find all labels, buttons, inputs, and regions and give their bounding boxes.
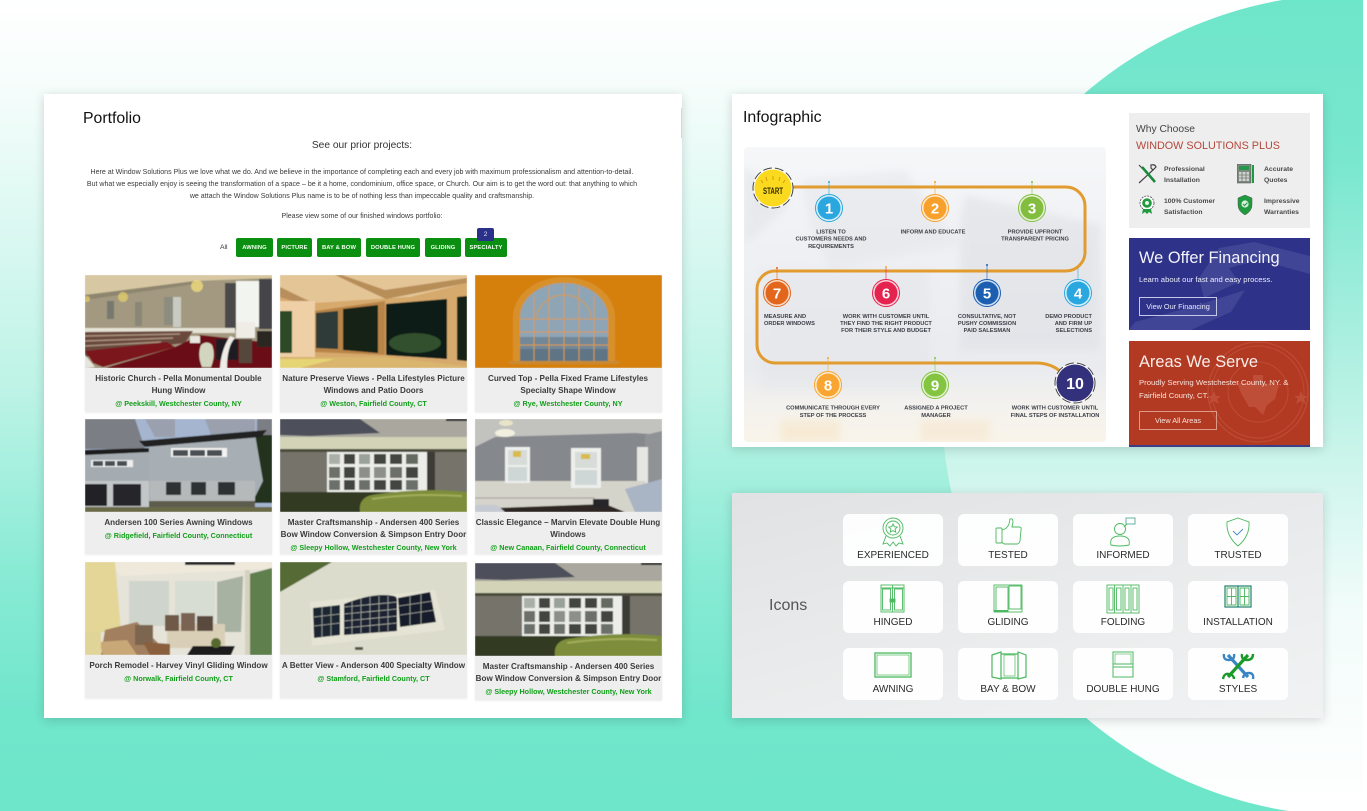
icon card: gliding: GLIDING: [987, 617, 1029, 628]
step labels: PAID SALESMAN: [964, 328, 1010, 334]
step 9: [922, 372, 948, 398]
icon card: informed: INFORMED: [1096, 550, 1150, 561]
areas button: [1139, 411, 1217, 430]
icon card: hinged: [843, 581, 943, 633]
card: historic church: [85, 275, 272, 412]
card: classic elegance: Windows: [550, 530, 586, 539]
step labels: FINAL STEPS OF INSTALLATION: [1011, 413, 1099, 419]
card: curved top: [474, 275, 662, 412]
feature: professional installation: [1164, 166, 1205, 184]
filter: bay and bow: BAY & BOW: [322, 245, 356, 251]
step 5: 5: [983, 286, 991, 302]
card: bow window: @ Sleepy Hollow, Westchester County, New York: [290, 543, 457, 552]
filter: awning: [236, 238, 273, 257]
card: a better view: A Better View - Anderson 400 Specialty Window: [282, 661, 465, 670]
card: curved top: @ Rye, Westchester County, NY: [514, 399, 622, 408]
filter: double hung: [366, 238, 420, 257]
intro text: But what we especially enjoy is seeing the transformation of a space – be it a home, condominium, office space, or Church. Our aim is to get the word out: that anything to which: [87, 181, 637, 188]
filter: picture: [277, 238, 312, 257]
step 3: [1018, 194, 1046, 222]
areas text: [1139, 378, 1288, 400]
card: bow window: [280, 419, 467, 554]
process path: [757, 187, 1085, 373]
intro text: [87, 168, 637, 200]
portfolio prompt: Please view some of our finished windows portfolio:: [282, 213, 442, 220]
icon card: installation: [1188, 581, 1288, 633]
filter count badge: [477, 228, 494, 241]
icon card: awning: AWNING: [873, 684, 913, 695]
heading: icons: Icons: [769, 597, 807, 614]
heading: infographic: Infographic: [743, 109, 822, 126]
panel: infographic: [732, 94, 1323, 447]
panel: portfolio: [44, 94, 682, 718]
icon card: double hung: [1073, 648, 1173, 700]
card: andersen awning: [85, 419, 272, 554]
step 2: 2: [931, 200, 939, 218]
icon card: awning: [843, 648, 943, 700]
financing button: [1139, 297, 1217, 316]
stamp motif: [1208, 342, 1308, 442]
step 1: [816, 194, 842, 222]
card: classic elegance: @ New Canaan, Fairfield County, Connecticut: [490, 543, 646, 552]
filter: bay and bow: [317, 238, 361, 257]
card: bow window: Master Craftsmanship - Andersen 400 Series: [288, 518, 459, 527]
icon: calculator: [1237, 164, 1254, 184]
step 10: 10: [1066, 376, 1084, 393]
step labels: MANAGER: [921, 413, 951, 419]
step labels: LISTEN TO: [816, 230, 846, 236]
feature: impressive warranties: [1264, 198, 1300, 216]
icon card: folding: [1073, 581, 1173, 633]
card: bow window repeat: [475, 563, 662, 700]
step labels: WORK WITH CUSTOMER UNTIL: [1012, 406, 1099, 412]
step 6: 6: [882, 286, 890, 302]
step labels: COMMUNICATE THROUGH EVERY: [786, 406, 880, 412]
card: bow window repeat: Bow Window Conversion & Simpson Entry Door: [476, 674, 661, 683]
bottom edge: [1129, 445, 1310, 447]
areas text: Proudly Serving Westchester County, NY. &: [1139, 378, 1288, 387]
filter: specialty: SPECIALTY: [469, 245, 502, 251]
card: bow window repeat: @ Sleepy Hollow, Westchester County, New York: [485, 687, 652, 696]
step labels: PROVIDE UPFRONT: [1008, 230, 1063, 236]
icon card: styles: [1188, 648, 1288, 700]
step labels: WORK WITH CUSTOMER UNTIL: [843, 314, 930, 320]
areas heading: Areas We Serve: [1139, 353, 1258, 371]
step 1: 1: [825, 200, 833, 218]
feature: accurate quotes: Quotes: [1264, 176, 1287, 184]
step labels: INFORM AND EDUCATE: [901, 230, 966, 236]
filter count badge: 2: [484, 231, 487, 238]
heading: portfolio: Portfolio: [83, 110, 141, 127]
step 2: [922, 194, 948, 222]
step labels: ORDER WINDOWS: [764, 321, 815, 327]
why choose heading: Why Choose: [1136, 124, 1195, 135]
step labels: CONSULTATIVE, NOT: [958, 314, 1017, 320]
filter: all: All: [220, 244, 228, 251]
hand motif: [1129, 242, 1310, 330]
card: nature preserve views: @ Weston, Fairfield County, CT: [320, 399, 427, 408]
icon card: trusted: [1188, 514, 1288, 566]
financing button: View Our Financing: [1146, 302, 1210, 311]
start badge: START: [763, 186, 783, 197]
step labels: STEP OF THE PROCESS: [800, 413, 866, 419]
step labels: [764, 230, 1099, 419]
icon: shield: [1238, 195, 1252, 215]
card: curved top: Specialty Shape Window: [520, 386, 616, 395]
step 6: [872, 280, 900, 306]
feature: customer satisfaction: 100% Customer: [1164, 198, 1215, 205]
filter: specialty: [465, 238, 507, 257]
step labels: ASSIGNED A PROJECT: [904, 406, 968, 412]
card: classic elegance: Classic Elegance – Marvin Elevate Double Hung: [476, 518, 660, 527]
step labels: REQUIREMENTS: [808, 244, 854, 250]
icon card: hinged: HINGED: [874, 617, 912, 628]
icon card: double hung: DOUBLE HUNG: [1086, 684, 1160, 695]
filter: awning: AWNING: [242, 245, 267, 251]
card: nature preserve views: Nature Preserve Views - Pella Lifestyles Picture: [282, 374, 465, 383]
feature: accurate quotes: Accurate: [1264, 166, 1293, 173]
icon card: folding: FOLDING: [1101, 617, 1145, 628]
card: curved top: Curved Top - Pella Fixed Frame Lifestyles: [488, 374, 648, 383]
filter: gliding: [425, 238, 461, 257]
feature: customer satisfaction: [1164, 198, 1215, 216]
card: nature preserve views: Windows and Patio Doors: [324, 386, 423, 395]
intro text: we attach the Window Solutions Plus name is to be of nothing less than impeccable quality and craftsmanship.: [190, 193, 534, 200]
card: historic church: Hung Window: [152, 386, 205, 395]
step labels: DEMO PRODUCT: [1045, 314, 1093, 320]
step labels: FOR THEIR STYLE AND BUDGET: [841, 328, 931, 334]
process infographic: [744, 147, 1106, 442]
sidebar: financing: [1129, 238, 1310, 330]
step labels: THEY FIND THE RIGHT PRODUCT: [840, 321, 932, 327]
step 7: [764, 280, 790, 306]
feature: customer satisfaction: Satisfaction: [1164, 208, 1203, 216]
step labels: CUSTOMERS NEEDS AND: [795, 236, 867, 242]
icon card: experienced: EXPERIENCED: [857, 550, 929, 561]
card: porch remodel: Porch Remodel - Harvey Vinyl Gliding Window: [89, 661, 268, 670]
card: porch remodel: [85, 562, 272, 698]
sidebar: why choose: [1129, 113, 1310, 228]
step labels: PUSHY COMMISSION: [958, 321, 1016, 327]
intro text: Here at Window Solutions Plus we love what we do. And we believe in the importance of completing each and every job with maximum professionalism and attention-to-detail.: [91, 169, 633, 176]
icon card: tested: TESTED: [988, 550, 1028, 561]
card: bow window repeat: Master Craftsmanship - Andersen 400 Series: [483, 662, 654, 671]
icon card: tested: [958, 514, 1058, 566]
step labels: SELECTIONS: [1056, 328, 1092, 334]
step 3: 3: [1028, 200, 1036, 218]
feature: professional installation: Professional: [1164, 166, 1205, 173]
feature: impressive warranties: Impressive: [1264, 198, 1300, 205]
company name: WINDOW SOLUTIONS PLUS: [1136, 140, 1280, 152]
icon card: gliding: [958, 581, 1058, 633]
filter: double hung: DOUBLE HUNG: [371, 245, 415, 251]
financing heading: We Offer Financing: [1139, 249, 1280, 267]
feature: impressive warranties: Warranties: [1264, 208, 1299, 216]
feature: professional installation: Installation: [1164, 176, 1200, 184]
panel: icons: [732, 493, 1323, 718]
step 10: [1055, 363, 1095, 403]
card: classic elegance: [474, 419, 662, 554]
financing text: Learn about our fast and easy process.: [1139, 275, 1272, 284]
filter: gliding: GLIDING: [431, 245, 455, 251]
step 8: [814, 372, 842, 398]
icon: tools: [1138, 164, 1157, 184]
icon card: trusted: TRUSTED: [1214, 550, 1262, 561]
card: andersen awning: @ Ridgefield, Fairfield County, Connecticut: [105, 531, 252, 540]
card: porch remodel: @ Norwalk, Fairfield County, CT: [124, 674, 233, 683]
step 9: 9: [931, 378, 939, 394]
card: nature preserve views: [280, 275, 467, 412]
step labels: AND FIRM UP: [1055, 321, 1092, 327]
card: historic church: Historic Church - Pella Monumental Double: [95, 374, 262, 383]
card: andersen awning: Andersen 100 Series Awning Windows: [104, 518, 253, 527]
icon: award: [1140, 196, 1154, 214]
step labels: MEASURE AND: [764, 314, 806, 320]
areas text: Fairfield County, CT.: [1139, 391, 1209, 400]
icon card: bay and bow: [958, 648, 1058, 700]
step 5: [974, 280, 1000, 306]
card: historic church: @ Peekskill, Westchester County, NY: [115, 399, 242, 408]
scrollbar edge: [681, 108, 682, 138]
step labels: TRANSPARENT PRICING: [1001, 236, 1069, 242]
sidebar: areas we serve: [1129, 341, 1310, 447]
card: a better view: @ Stamford, Fairfield County, CT: [317, 674, 430, 683]
feature: accurate quotes: [1264, 166, 1293, 184]
icon card: installation: INSTALLATION: [1203, 617, 1273, 628]
step 4: 4: [1074, 286, 1083, 302]
subheading: See our prior projects:: [312, 140, 412, 151]
card: a better view: [280, 562, 467, 698]
step 4: [1064, 280, 1092, 306]
card: bow window: Bow Window Conversion & Simpson Entry Door: [281, 530, 466, 539]
icon card: informed: [1073, 514, 1173, 566]
filter: picture: PICTURE: [281, 245, 308, 251]
steps: [764, 194, 1095, 403]
step 7: 7: [773, 286, 781, 302]
step 8: 8: [824, 378, 832, 394]
icon card: styles: STYLES: [1219, 684, 1257, 695]
icon card: experienced: [843, 514, 943, 566]
areas button: View All Areas: [1155, 416, 1201, 425]
start badge: [753, 168, 793, 208]
icon card: bay and bow: BAY & BOW: [980, 684, 1036, 695]
